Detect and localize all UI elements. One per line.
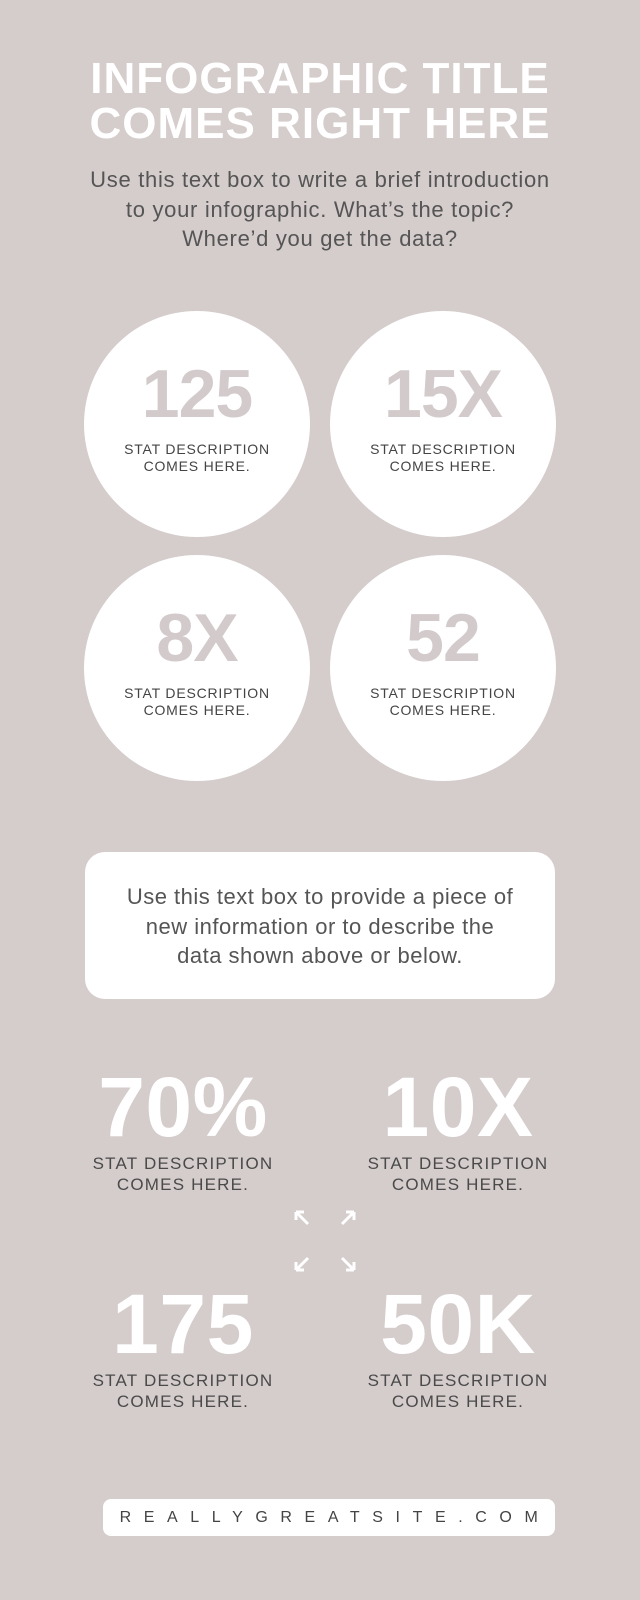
- stat: 50K: COMES HERE.: [392, 1392, 524, 1411]
- stat: 70%: STAT DESCRIPTION: [93, 1154, 273, 1173]
- stat: 175: COMES HERE.: [117, 1392, 249, 1411]
- stat: 10X: [368, 1060, 548, 1194]
- circle stat: 52: 52: [406, 600, 480, 676]
- stat: 70%: COMES HERE.: [117, 1175, 249, 1194]
- circle stat: 52: [330, 555, 556, 781]
- stat: 70%: [93, 1060, 273, 1194]
- circle stat: 8X: 8X: [156, 600, 238, 676]
- stat: 50K: 50K: [380, 1277, 536, 1371]
- info text box: data shown above or below.: [177, 943, 463, 968]
- info text box: Use this text box to provide a piece of: [127, 884, 513, 909]
- stat: 70%: 70%: [98, 1060, 268, 1154]
- stat: 50K: STAT DESCRIPTION: [368, 1371, 548, 1390]
- circle stat: 8X: STAT DESCRIPTION: [124, 685, 270, 701]
- title: [90, 54, 550, 148]
- circle stat: 125: COMES HERE.: [144, 458, 250, 474]
- circle stat: 52: STAT DESCRIPTION: [370, 685, 516, 701]
- intro text: [90, 167, 550, 251]
- stat: 50K: [368, 1277, 548, 1411]
- footer url pill: REALLYGREATSITE.COM: [120, 1509, 550, 1526]
- stat: 175: 175: [112, 1277, 254, 1371]
- footer url pill: [103, 1499, 555, 1536]
- stat: 175: [93, 1277, 273, 1411]
- circle stat: 15X: STAT DESCRIPTION: [370, 441, 516, 457]
- info text box: [85, 852, 555, 999]
- icon: expand arrows: [294, 1210, 356, 1272]
- circle stat: 52: COMES HERE.: [390, 702, 496, 718]
- circle stat: 8X: COMES HERE.: [144, 702, 250, 718]
- circle stat: 125: 125: [142, 356, 252, 432]
- circle stat: 15X: 15X: [384, 356, 502, 432]
- stat: 175: STAT DESCRIPTION: [93, 1371, 273, 1390]
- circle stat: 8X: [84, 555, 310, 781]
- circle stat: 125: [84, 311, 310, 537]
- circle stat: 15X: COMES HERE.: [390, 458, 496, 474]
- title: INFOGRAPHIC TITLE: [90, 54, 550, 103]
- stat: 10X: 10X: [383, 1060, 533, 1154]
- intro text: Use this text box to write a brief introduction: [90, 167, 550, 192]
- circle stat: 15X: [330, 311, 556, 537]
- title: COMES RIGHT HERE: [90, 99, 550, 148]
- intro text: Where’d you get the data?: [182, 226, 458, 251]
- circle stat: 125: STAT DESCRIPTION: [124, 441, 270, 457]
- stat: 10X: STAT DESCRIPTION: [368, 1154, 548, 1173]
- info text box: new information or to describe the: [146, 914, 494, 938]
- intro text: to your infographic. What’s the topic?: [126, 196, 514, 222]
- stat: 10X: COMES HERE.: [392, 1175, 524, 1194]
